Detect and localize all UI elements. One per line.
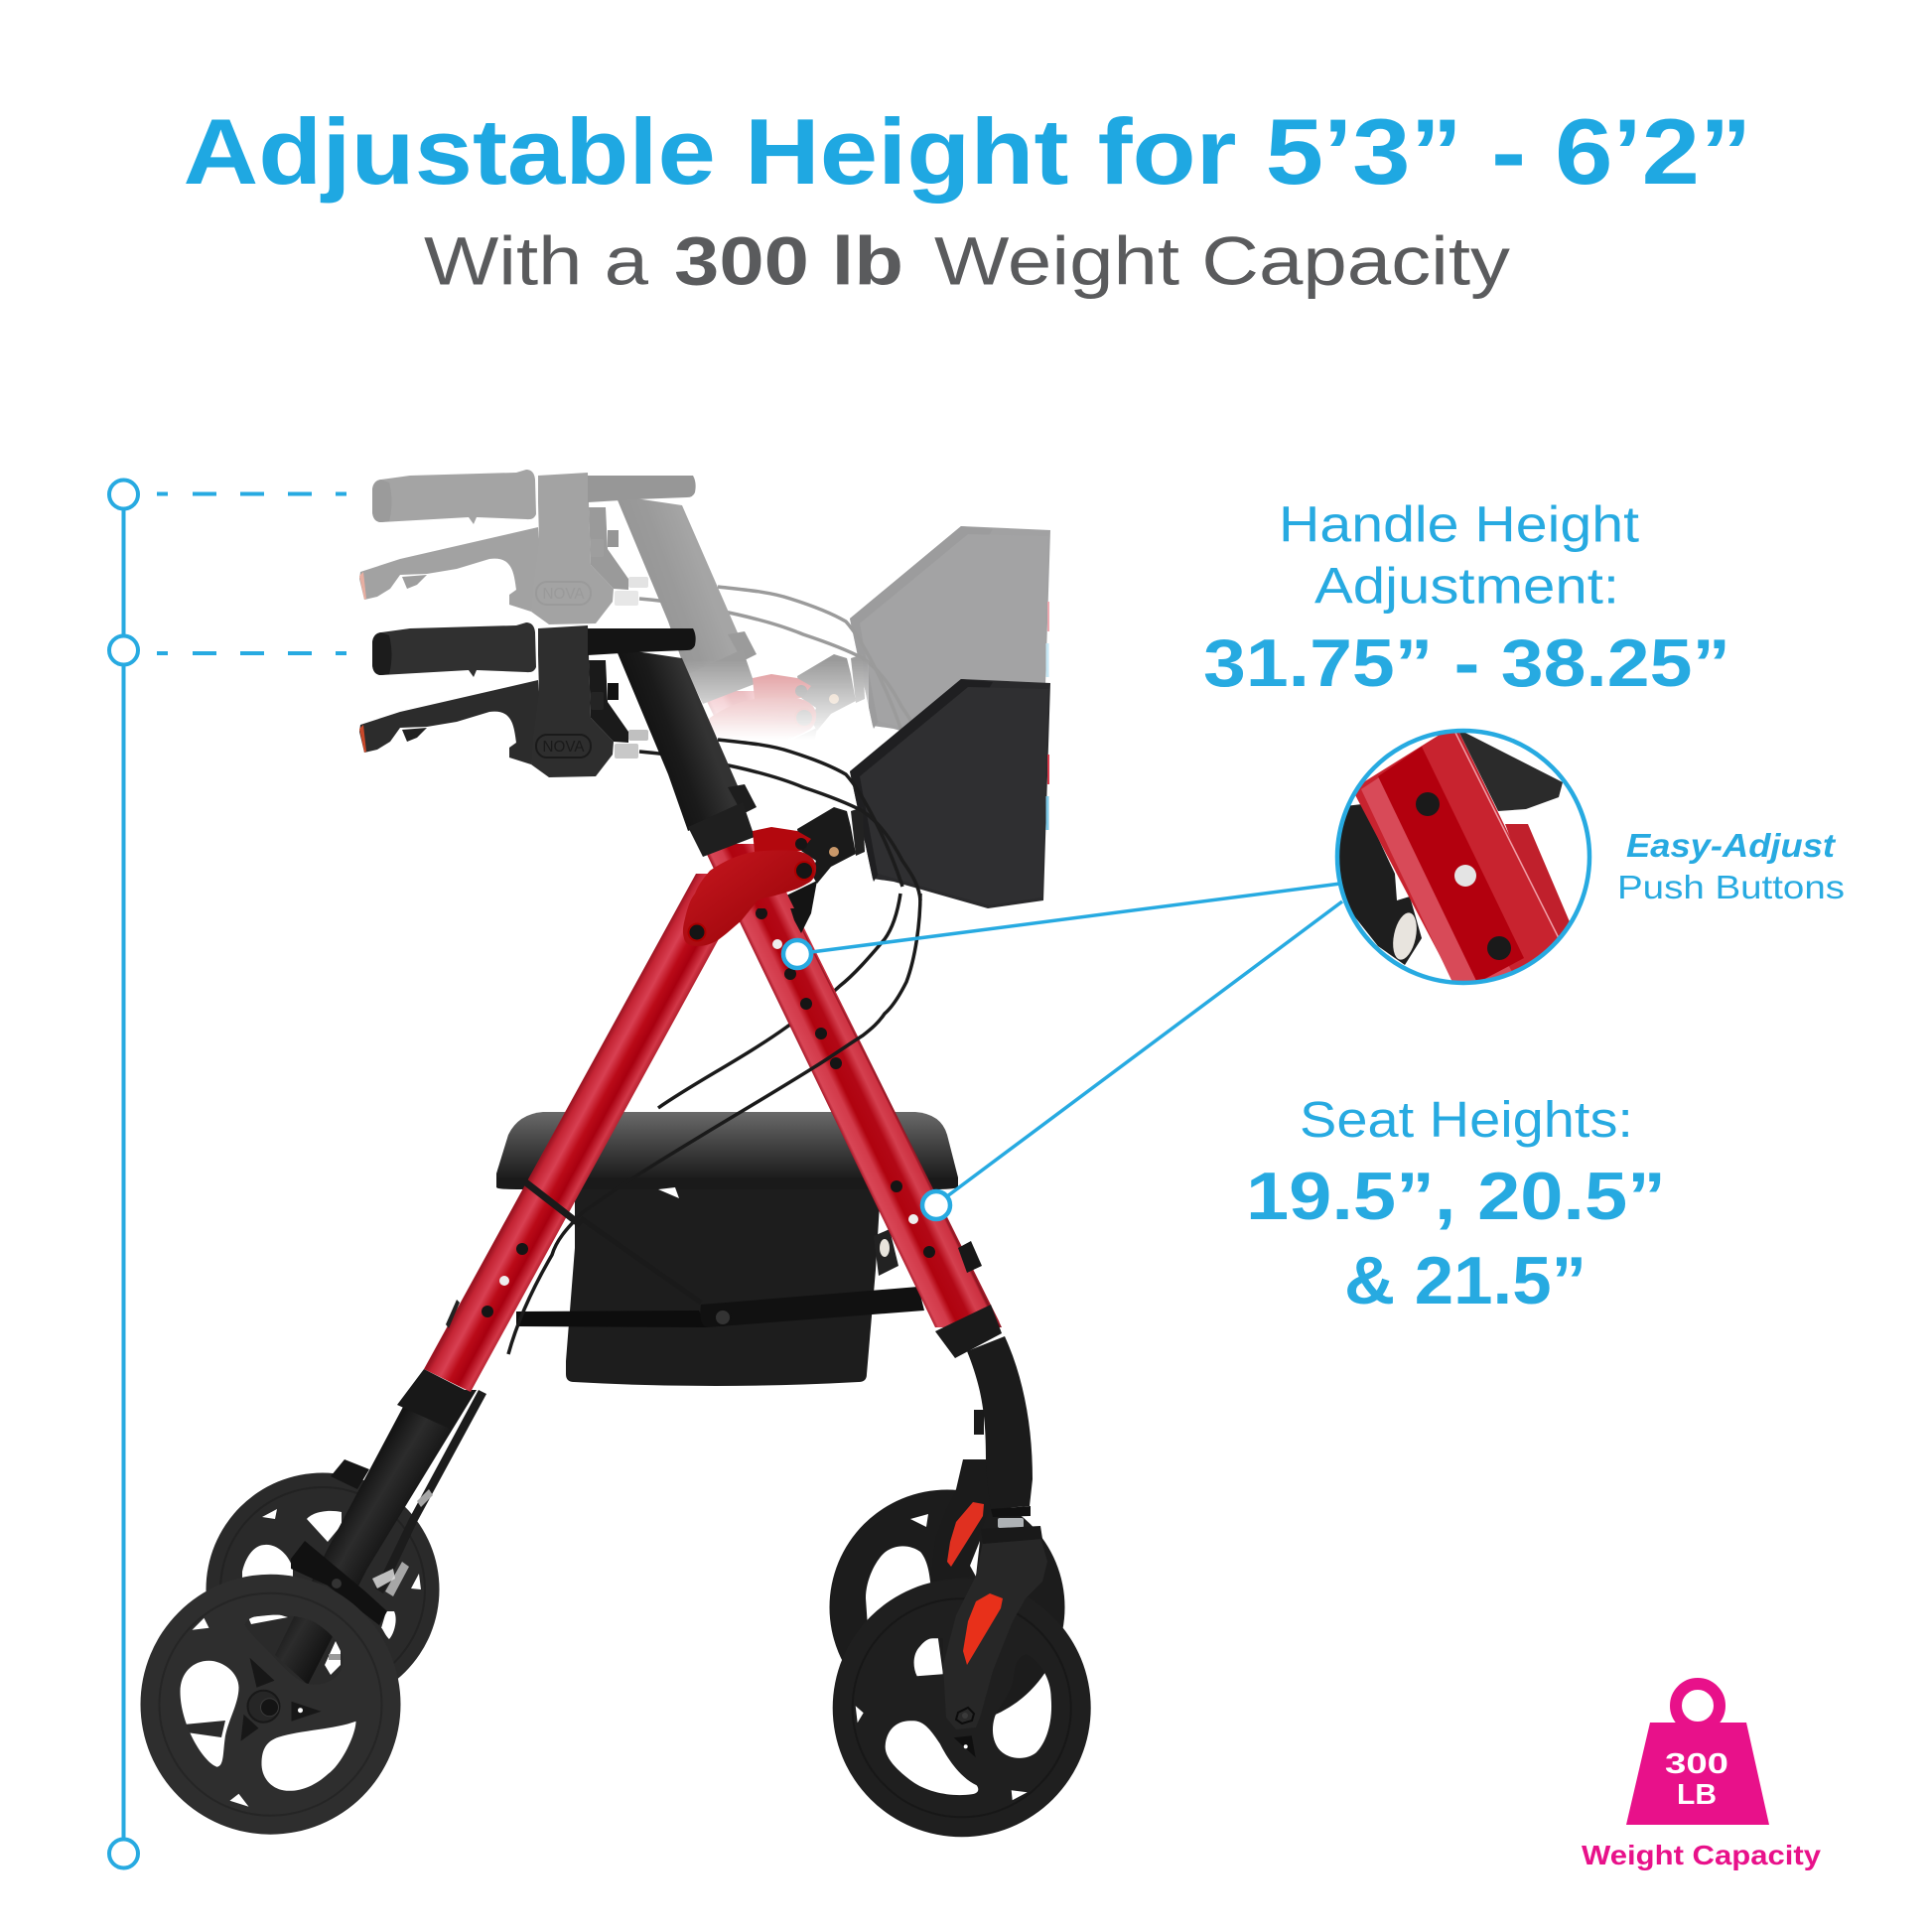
cables [639,740,920,900]
handle, backrest and pivot assembly [359,622,1050,946]
rear right fork with reflector [930,1410,993,1581]
storage bag [566,1187,881,1386]
right tube [702,844,1002,1327]
label: handle height: Handle Height [1279,496,1639,552]
callout markers and leader lines [783,884,1342,1219]
front right wheel [833,1579,1091,1837]
rear left wheel [207,1472,439,1707]
brake lever [359,680,541,764]
subtitle: 300 lb [674,222,903,300]
label: easy-adjust push buttons: Push Buttons [1617,869,1845,905]
front right fork [943,1526,1047,1729]
upper stem clamp [728,784,757,814]
front cable and tie [508,894,920,1354]
label: handle height: Adjustment: [1314,558,1619,614]
label: easy-adjust push buttons [1617,827,1845,905]
right tube top [702,844,794,908]
seat-side push button mount [874,1229,898,1276]
icon: 300 lb weight capacity [1582,1684,1821,1870]
subtitle: Weight Capacity [934,222,1511,300]
label: handle height [1203,496,1730,701]
lower stem clamp [688,802,755,857]
zoomed detail circle: push buttons [1336,725,1589,993]
pivot plate [683,827,816,946]
seat [496,1112,958,1198]
stem [616,648,747,831]
label: seat heights: 19.5”, 20.5” [1246,1159,1666,1234]
icon: 300 lb weight capacity: 300 [1665,1748,1728,1780]
brake body [531,625,648,777]
icon: 300 lb weight capacity: Weight Capacity [1582,1840,1821,1870]
label: easy-adjust push buttons: Easy-Adjust [1626,827,1837,864]
label: seat heights: Seat Heights: [1300,1091,1633,1148]
ghost raised handle position [359,470,1050,734]
handle bar [588,628,696,655]
left tube [424,874,755,1392]
subtitle [424,222,1511,300]
front left wheel [141,1575,401,1835]
backrest [850,679,1050,908]
rear cable behind right tube [658,894,900,1108]
subtitle: With a [424,222,649,300]
brake body: NOVA [542,739,585,756]
label: seat heights: & 21.5” [1344,1243,1587,1318]
backrest bracket [786,807,865,933]
icon: 300 lb weight capacity: LB [1677,1779,1717,1811]
rear right wheel [830,1489,1064,1725]
right curved leg [935,1305,1033,1528]
cross bars [516,1218,924,1327]
height scale with markers [109,481,346,1868]
label: seat heights [1246,1091,1666,1318]
grip [372,622,536,677]
title: Adjustable Height for 5’3” - 6’2” [183,99,1751,204]
left tube clamp [397,1369,473,1430]
label: handle height: 31.75” - 38.25” [1203,625,1730,701]
parking brake bracket [291,1541,387,1625]
left lower frame with brake strut [184,1390,486,1737]
